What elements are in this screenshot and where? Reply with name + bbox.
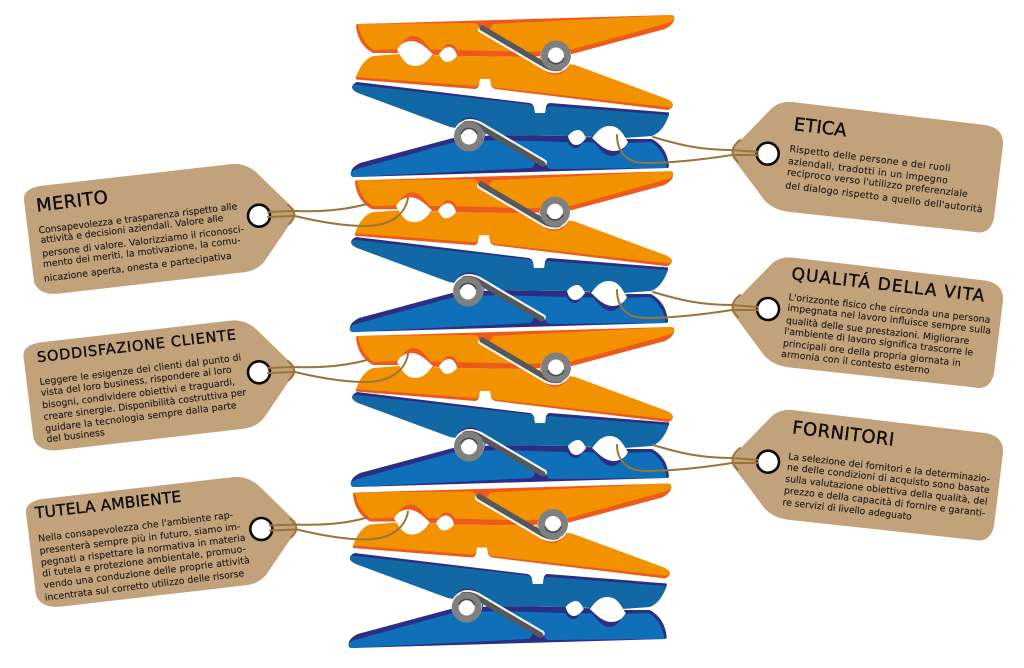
clothespin: orange 3 [356,327,674,422]
clothespin: blue 1 [351,82,669,177]
text: Etica: Rispetto delle persone e dei ruoli [789,144,951,174]
text: Soddisfazione cliente: creare sinergie. Disponibilità costruttiva per [43,387,247,423]
text: Tutela ambiente: di tutela e protezione ambientale, promuo- [42,544,247,580]
text: Soddisfazione cliente [39,352,247,445]
text: Fornitori: sulla valutazione obiettiva della qualità, del [785,474,988,508]
text: Qualità della vita [781,292,992,377]
tag: Soddisfazione cliente [23,320,408,450]
text: Etica: del dialogo rispetto a quello dell'autorità [785,180,983,215]
text: Qualità della vita: qualità delle sue prestazioni. Migliorare [785,315,970,347]
string: Merito [268,198,408,226]
text: Soddisfazione cliente: Leggere le esigenze dei clienti dal punto di [39,352,242,388]
text: Qualità della vita: principali ore della propria giornata in [782,338,962,369]
text: Merito [38,201,245,285]
text: Merito: nicazione aperta, onesta e partecipativa [43,251,232,285]
text: Soddisfazione cliente: vista del loro business, rispondere ai loro [40,365,233,399]
text: Fornitori: La selezione dei fornitori e la determinazio- [788,451,991,485]
string: Fornitori [617,445,758,471]
text: Fornitori [782,451,991,523]
title: Fornitori: FORNITORI [791,417,895,451]
title: Tutela ambiente: TUTELA AMBIENTE [33,488,182,522]
text: Tutela ambiente [38,510,250,604]
text: Fornitori: ne delle condizioni di acquisto sono basate [786,462,991,496]
clothespin: orange 2 [355,171,673,266]
clothespin: blue 3 [351,392,669,487]
tag: Etica [617,102,1003,232]
string: Qualità della vita [617,290,758,318]
text: Soddisfazione cliente: del business [46,427,106,445]
text: Qualità della vita: impegnata nel lavoro influisce sempre sulla [787,303,992,337]
text: Qualità della vita: armonia con il contesto esterno [781,349,931,377]
title: Soddisfazione cliente: SODDISFAZIONE CLIENTE [36,327,237,366]
clothespin: blue 4 [348,553,667,648]
text: Merito: mento dei meriti, la motivazione, la comu- [42,235,241,270]
text: Tutela ambiente: presenterà sempre più in futuro, siamo im- [39,521,241,557]
text: Etica [785,144,983,215]
title: Merito: MERITO [35,187,109,217]
text: Tutela ambiente: vendo una conduzione delle proprie attività [43,555,250,591]
string: Soddisfazione cliente [268,354,408,382]
text: Tutela ambiente: incentrata sul corretto utilizzo delle risorse [44,568,245,604]
text: Etica: aziendali, tradotti in un impegno [787,156,949,187]
title: Qualità della vita: QUALITÁ DELLA VITA [790,262,986,307]
string: Etica [617,135,758,163]
text: Fornitori: prezzo e della capacità di fornire e garanti- [783,485,986,519]
clothespin: orange 1 [356,15,674,110]
tag: Tutela ambiente [26,477,408,607]
text: Soddisfazione cliente: guidare la tecnologia sempre dalla parte [45,400,237,435]
tag: Fornitori [617,410,1003,540]
text: Tutela ambiente: pegnati a rispettare la normativa in materia [40,533,246,569]
title: Etica: ETICA [793,114,849,142]
text: Merito: Consapevolezza e trasparenza rispetto alle [38,201,238,236]
string: Tutela ambiente [270,512,408,540]
text: Tutela ambiente: Nella consapevolezza che l'ambiente rap- [38,510,234,545]
clothespin: blue 2 [350,237,668,332]
text: Soddisfazione cliente: bisogni, condividere obiettivi e traguardi, [42,377,236,411]
text: Merito: attività e decisioni aziendali. Valore alle [40,213,224,246]
text: Qualità della vita: L'orizzonte fisico che circonda una persona [788,292,991,326]
tag: Merito [24,164,408,294]
text: Fornitori: re servizi di livello adeguato [782,497,913,523]
clothespin: orange 4 [353,484,671,578]
clothespin stack [348,15,674,648]
text: Merito: persone di valore. Valorizziamo il riconosci- [42,224,245,260]
text: Etica: reciproco verso l'utilizzo preferenziale [786,167,969,200]
text: Qualità della vita: l'ambiente di lavoro significa trascorre le [784,326,974,359]
tag: Qualità della vita [617,257,1003,388]
